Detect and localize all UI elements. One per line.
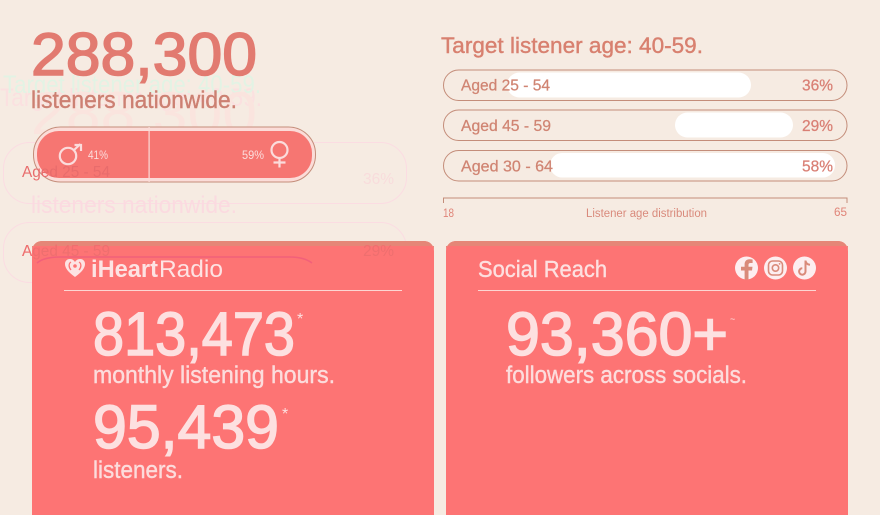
ghost labels over the pill <box>22 164 394 260</box>
bar: aged 25-54: 36% <box>802 78 833 94</box>
caption: listeners nationwide: listeners nationwide. <box>31 87 237 114</box>
footnote mark: * <box>297 311 303 328</box>
number: 288,300: 288,300 <box>31 21 257 88</box>
ghost labels over the pill: Aged 25 - 54 <box>22 164 110 181</box>
ghost artifacts behind the left column <box>0 71 406 282</box>
axis: listener age distribution <box>443 198 847 220</box>
icon: male symbol <box>60 144 81 164</box>
ghost artifacts behind the left column: listeners nationwide. <box>31 192 237 219</box>
bar: aged 45-59 <box>444 110 847 140</box>
header rule <box>478 290 816 291</box>
bar: aged 30-64: Aged 30 - 64 <box>461 158 553 176</box>
bar: aged 30-64 <box>444 150 847 181</box>
ghost labels over card: Aged 45 - 59 <box>22 243 110 260</box>
ghost artifacts behind the left column: 288,300 <box>31 80 257 147</box>
ghost labels over card: 29% <box>363 243 394 260</box>
bar: aged 30-64: 58% <box>802 158 833 176</box>
pill fill <box>37 131 312 178</box>
bar: aged 45-59: Aged 45 - 59 <box>461 118 551 135</box>
heading: social reach: Social Reach <box>478 256 607 282</box>
headline stat: nationwide listeners <box>31 21 257 114</box>
card top edge tint <box>32 241 434 251</box>
icon: tiktok <box>793 256 816 280</box>
divider between genders <box>148 127 150 182</box>
gender split pill <box>34 127 316 182</box>
bar: aged 25-54 <box>444 70 847 100</box>
male share: 41% <box>88 150 108 162</box>
logo wordmark: iHeart: iHeart <box>91 256 158 283</box>
ghost artifacts behind the left column: Target listener age: 40-59. <box>3 71 261 99</box>
card background <box>446 241 848 515</box>
card background <box>32 241 434 515</box>
axis: listener age distribution: 65 <box>834 207 847 219</box>
ghost artifacts behind the left column: Target listener age: 40-59. <box>0 84 262 112</box>
ghost labels over the pill: Aged 45 - 59 <box>22 243 110 260</box>
footnote mark: ~ <box>730 314 735 324</box>
footnote mark: * <box>282 406 288 423</box>
pill outline <box>34 127 316 182</box>
female share: 59% <box>242 150 264 162</box>
heading: target listener age: Target listener age: 40-59. <box>441 33 703 58</box>
icon: iHeartRadio heart logo <box>65 259 85 277</box>
ghost artifacts behind the left column: 36% <box>363 171 394 188</box>
panel: iHeartRadio <box>22 241 434 515</box>
axis: listener age distribution: 18 <box>443 208 454 220</box>
number: monthly listening hours: 813,473 <box>93 300 295 368</box>
ghost labels over the pill: 29% <box>363 243 394 260</box>
icon: facebook <box>735 256 758 280</box>
panel: social reach <box>446 241 848 515</box>
logo wordmark: Radio: Radio <box>159 256 223 283</box>
icon: female symbol <box>272 142 288 168</box>
header rule <box>64 290 402 291</box>
caption: followers across socials: followers across socials. <box>506 362 747 389</box>
number: listeners: 95,439 <box>93 393 279 461</box>
number: followers: 93,360+ <box>506 300 728 368</box>
ghost labels over card <box>22 243 394 263</box>
axis: listener age distribution: Listener age distribution <box>586 208 707 220</box>
bar: aged 25-54: Aged 25 - 54 <box>461 78 550 94</box>
caption: monthly listening hours: monthly listening hours. <box>93 362 335 389</box>
icon: instagram <box>764 256 787 280</box>
bar: aged 45-59: 29% <box>802 118 833 135</box>
panel: target listener age <box>441 33 847 220</box>
card top edge tint <box>446 241 848 251</box>
caption: listeners: listeners. <box>93 457 183 484</box>
